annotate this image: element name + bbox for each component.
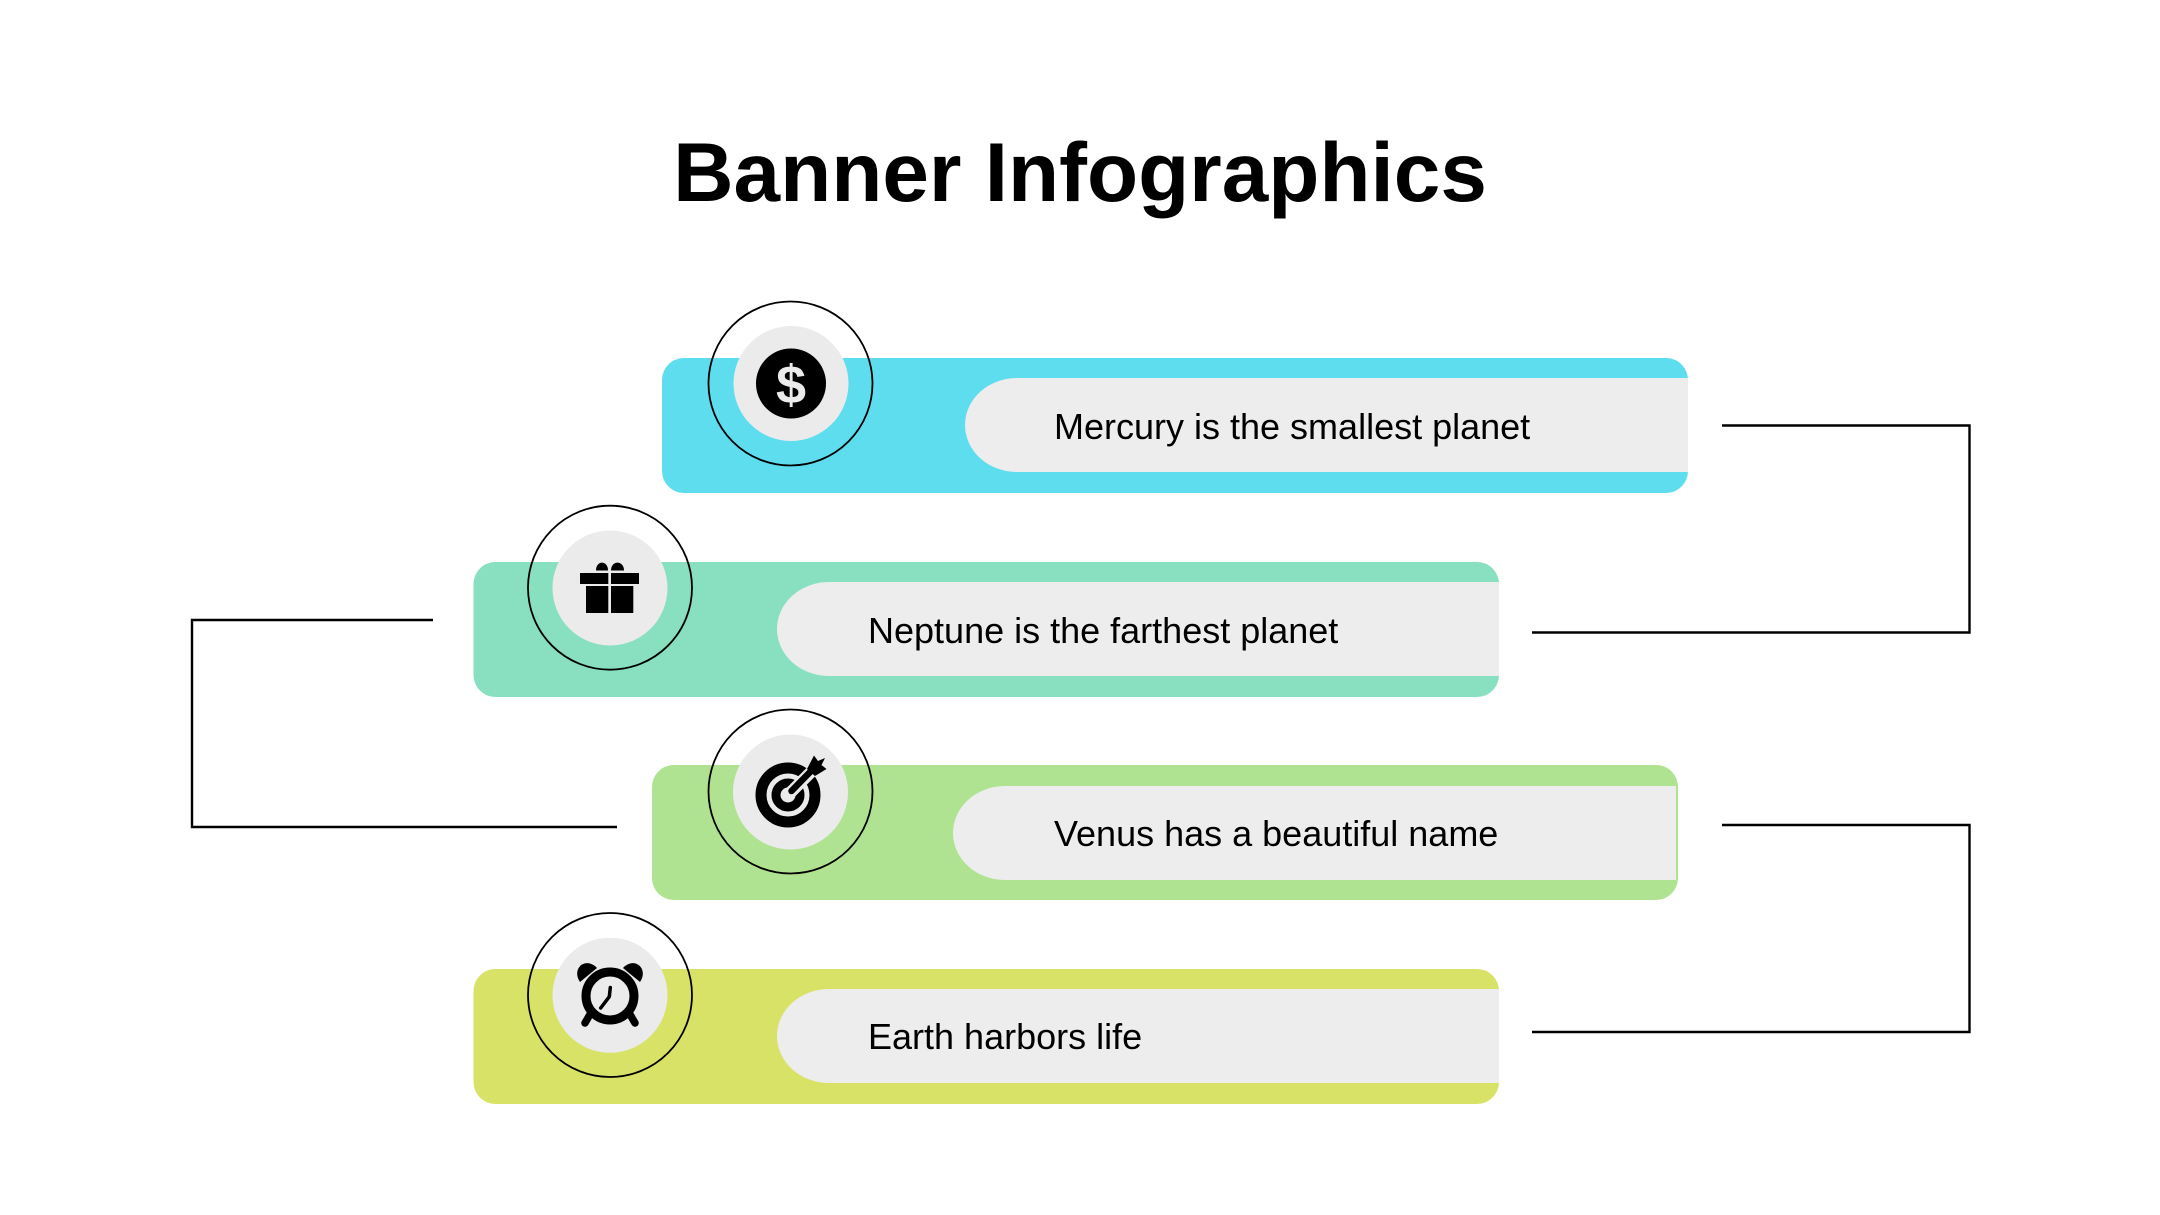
connector: banner 1 to banner 2 xyxy=(1532,426,1970,632)
banner background xyxy=(652,765,1678,900)
icon: dollar coin xyxy=(756,348,826,418)
panel: Earth banner xyxy=(474,913,1499,1104)
icon badge background xyxy=(552,938,668,1053)
banner background xyxy=(474,562,1499,697)
text pill xyxy=(953,786,1676,880)
icon: gift box xyxy=(580,563,639,613)
badge outline ring xyxy=(528,506,692,670)
text pill xyxy=(777,582,1499,676)
icon badge background xyxy=(734,326,848,441)
title: Banner Infographics xyxy=(673,125,1487,219)
panel: Venus banner xyxy=(652,710,1678,900)
badge outline ring xyxy=(708,710,872,874)
banner text: Neptune is the farthest planet xyxy=(868,610,1338,651)
banner text: Earth harbors life xyxy=(868,1016,1142,1057)
badge outline ring xyxy=(528,913,692,1077)
text pill xyxy=(965,378,1688,472)
icon: target with arrow xyxy=(761,756,826,822)
banner text: Mercury is the smallest planet xyxy=(1054,406,1530,447)
banner background xyxy=(662,358,1688,493)
banner text: Venus has a beautiful name xyxy=(1054,813,1498,854)
connector: banner 2 to banner 3 xyxy=(192,620,617,827)
banner background xyxy=(474,969,1499,1104)
badge outline ring xyxy=(708,302,872,466)
panel: Neptune banner xyxy=(474,506,1499,697)
text pill xyxy=(777,989,1499,1083)
icon badge background xyxy=(552,530,668,646)
panel: Mercury banner xyxy=(662,302,1688,493)
icon: dollar coin: $ xyxy=(776,355,806,415)
connector: banner 3 to banner 4 xyxy=(1532,825,1970,1032)
icon badge background xyxy=(733,734,848,850)
icon: alarm clock xyxy=(577,963,643,1023)
